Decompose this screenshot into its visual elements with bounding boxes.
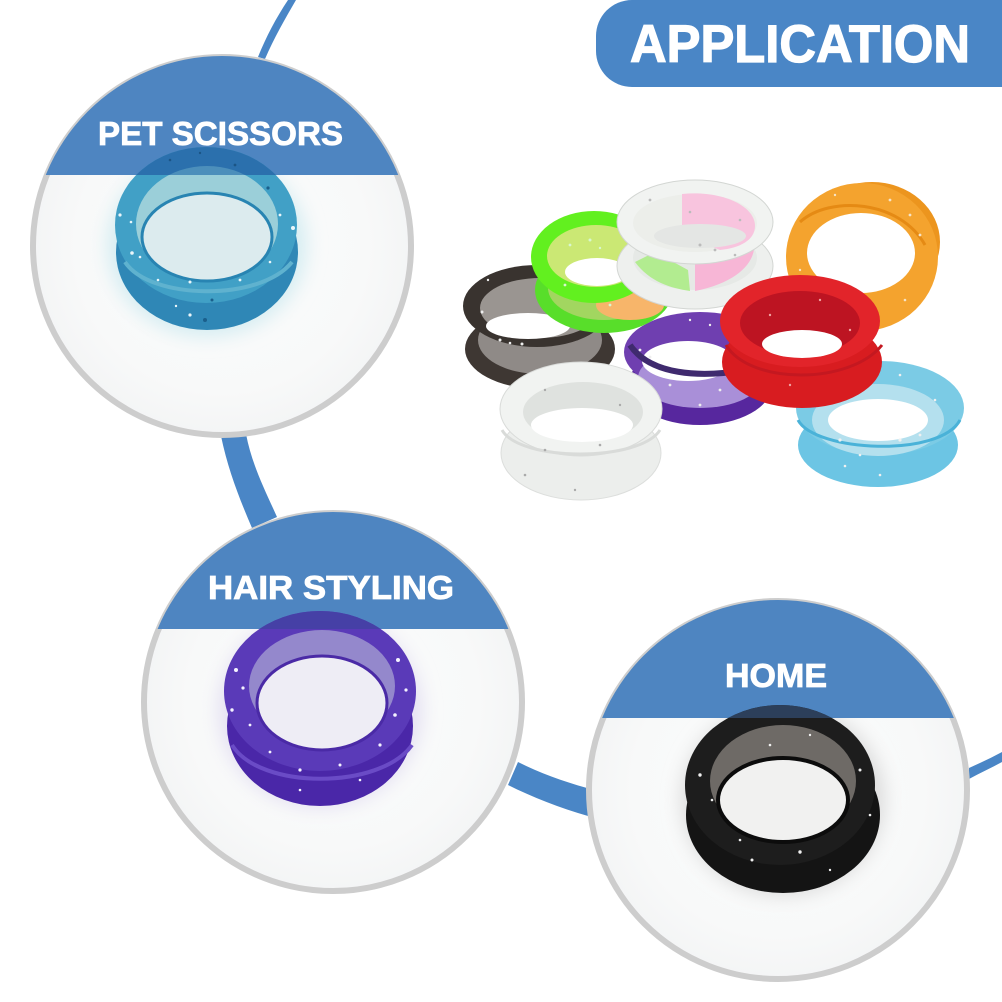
icon: black glitter ring (685, 705, 880, 893)
connecting arc: between pet scissors and hair styling (221, 434, 277, 528)
icon: green ring (531, 211, 673, 333)
icon: clear and pink ring (617, 180, 773, 309)
panel: hair styling (141, 510, 525, 891)
icon: orange ring (786, 182, 940, 331)
panel: application title pill (596, 0, 1002, 87)
icon: blue glitter ring (115, 175, 298, 330)
icon: purple ring (624, 312, 776, 425)
icon: black ring (463, 265, 615, 389)
heading: pet scissors: PET SCISSORS (98, 115, 343, 152)
icon: red ring (720, 275, 882, 408)
panel: pet scissors (30, 55, 414, 435)
ring seen through banner (260, 611, 380, 629)
ring seen through banner (728, 705, 832, 718)
ring seen through banner (136, 147, 276, 175)
panel: assorted colored rings (463, 180, 964, 500)
icon: clear white ring (500, 362, 662, 500)
connecting arc: between hair styling and home (508, 762, 588, 816)
heading: hair styling: HAIR STYLING (208, 569, 454, 606)
connecting arc: right (969, 752, 1002, 779)
heading: home: HOME (725, 657, 827, 694)
title: APPLICATION (630, 15, 970, 74)
connecting arc: top (258, 0, 296, 59)
icon: light blue ring (796, 361, 964, 487)
panel: home (586, 598, 970, 979)
icon: purple glitter ring (224, 611, 416, 806)
